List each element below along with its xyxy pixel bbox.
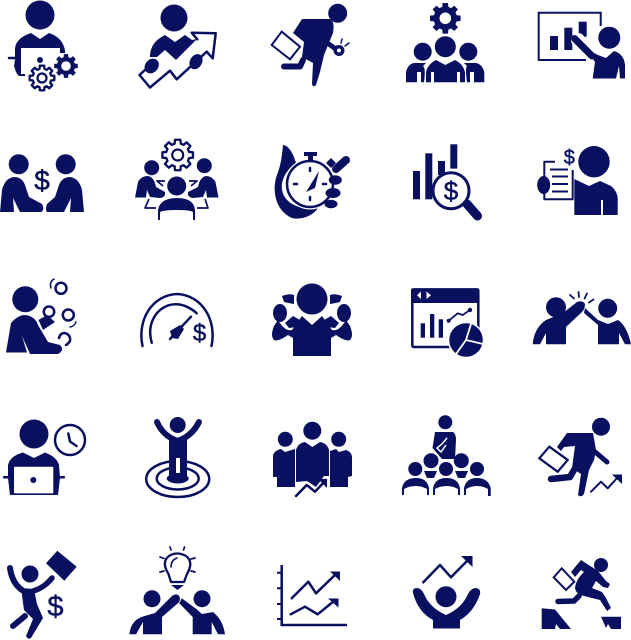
icon: leader above an audience bbox=[402, 415, 491, 496]
icon: person at laptop with gears bbox=[9, 0, 78, 90]
icon: person juggling coins bbox=[6, 279, 76, 354]
icon: person with financial document bbox=[537, 146, 618, 215]
icon: analytics dashboard window bbox=[411, 288, 484, 358]
icon: jumping businessman with dollar bbox=[10, 551, 77, 639]
icon: running businessman with trend arrow bbox=[539, 418, 622, 496]
icon: businessman leaping between blocks bbox=[542, 558, 621, 629]
icon: stopwatch held in hand bbox=[275, 145, 346, 219]
icon: running businessman with briefcase bbox=[272, 4, 349, 86]
icon: two people high five bbox=[533, 292, 631, 344]
icon: speedometer with dollar bbox=[141, 294, 213, 347]
icon: handshake with dollar: $ bbox=[34, 165, 50, 196]
icon: person on target arms raised bbox=[146, 417, 209, 497]
icon: strong man flexing bbox=[272, 284, 352, 356]
icon: jumping businessman with dollar: $ bbox=[47, 591, 64, 623]
icon: business team with growth arrow bbox=[273, 422, 352, 496]
icon: speedometer with dollar: $ bbox=[193, 320, 206, 347]
icon: person celebrating under arrow bbox=[413, 556, 480, 628]
icon: bar chart with magnifier and dollar bbox=[413, 144, 478, 216]
icon: line chart with two arrows bbox=[277, 565, 347, 625]
icon: handshake with dollar bbox=[0, 154, 84, 212]
icon: person with rising arrow bbox=[140, 4, 216, 88]
icon: person with financial document: $ bbox=[564, 147, 575, 169]
icon: team with gear bbox=[406, 3, 484, 82]
icon: two people reaching to a lightbulb bbox=[129, 547, 225, 634]
icon: meeting table with gear bbox=[135, 140, 218, 220]
icon: person on laptop with clock bbox=[3, 420, 85, 495]
icon: presenter at chart board bbox=[539, 13, 625, 79]
icon: bar chart with magnifier and dollar: $ bbox=[444, 176, 459, 206]
